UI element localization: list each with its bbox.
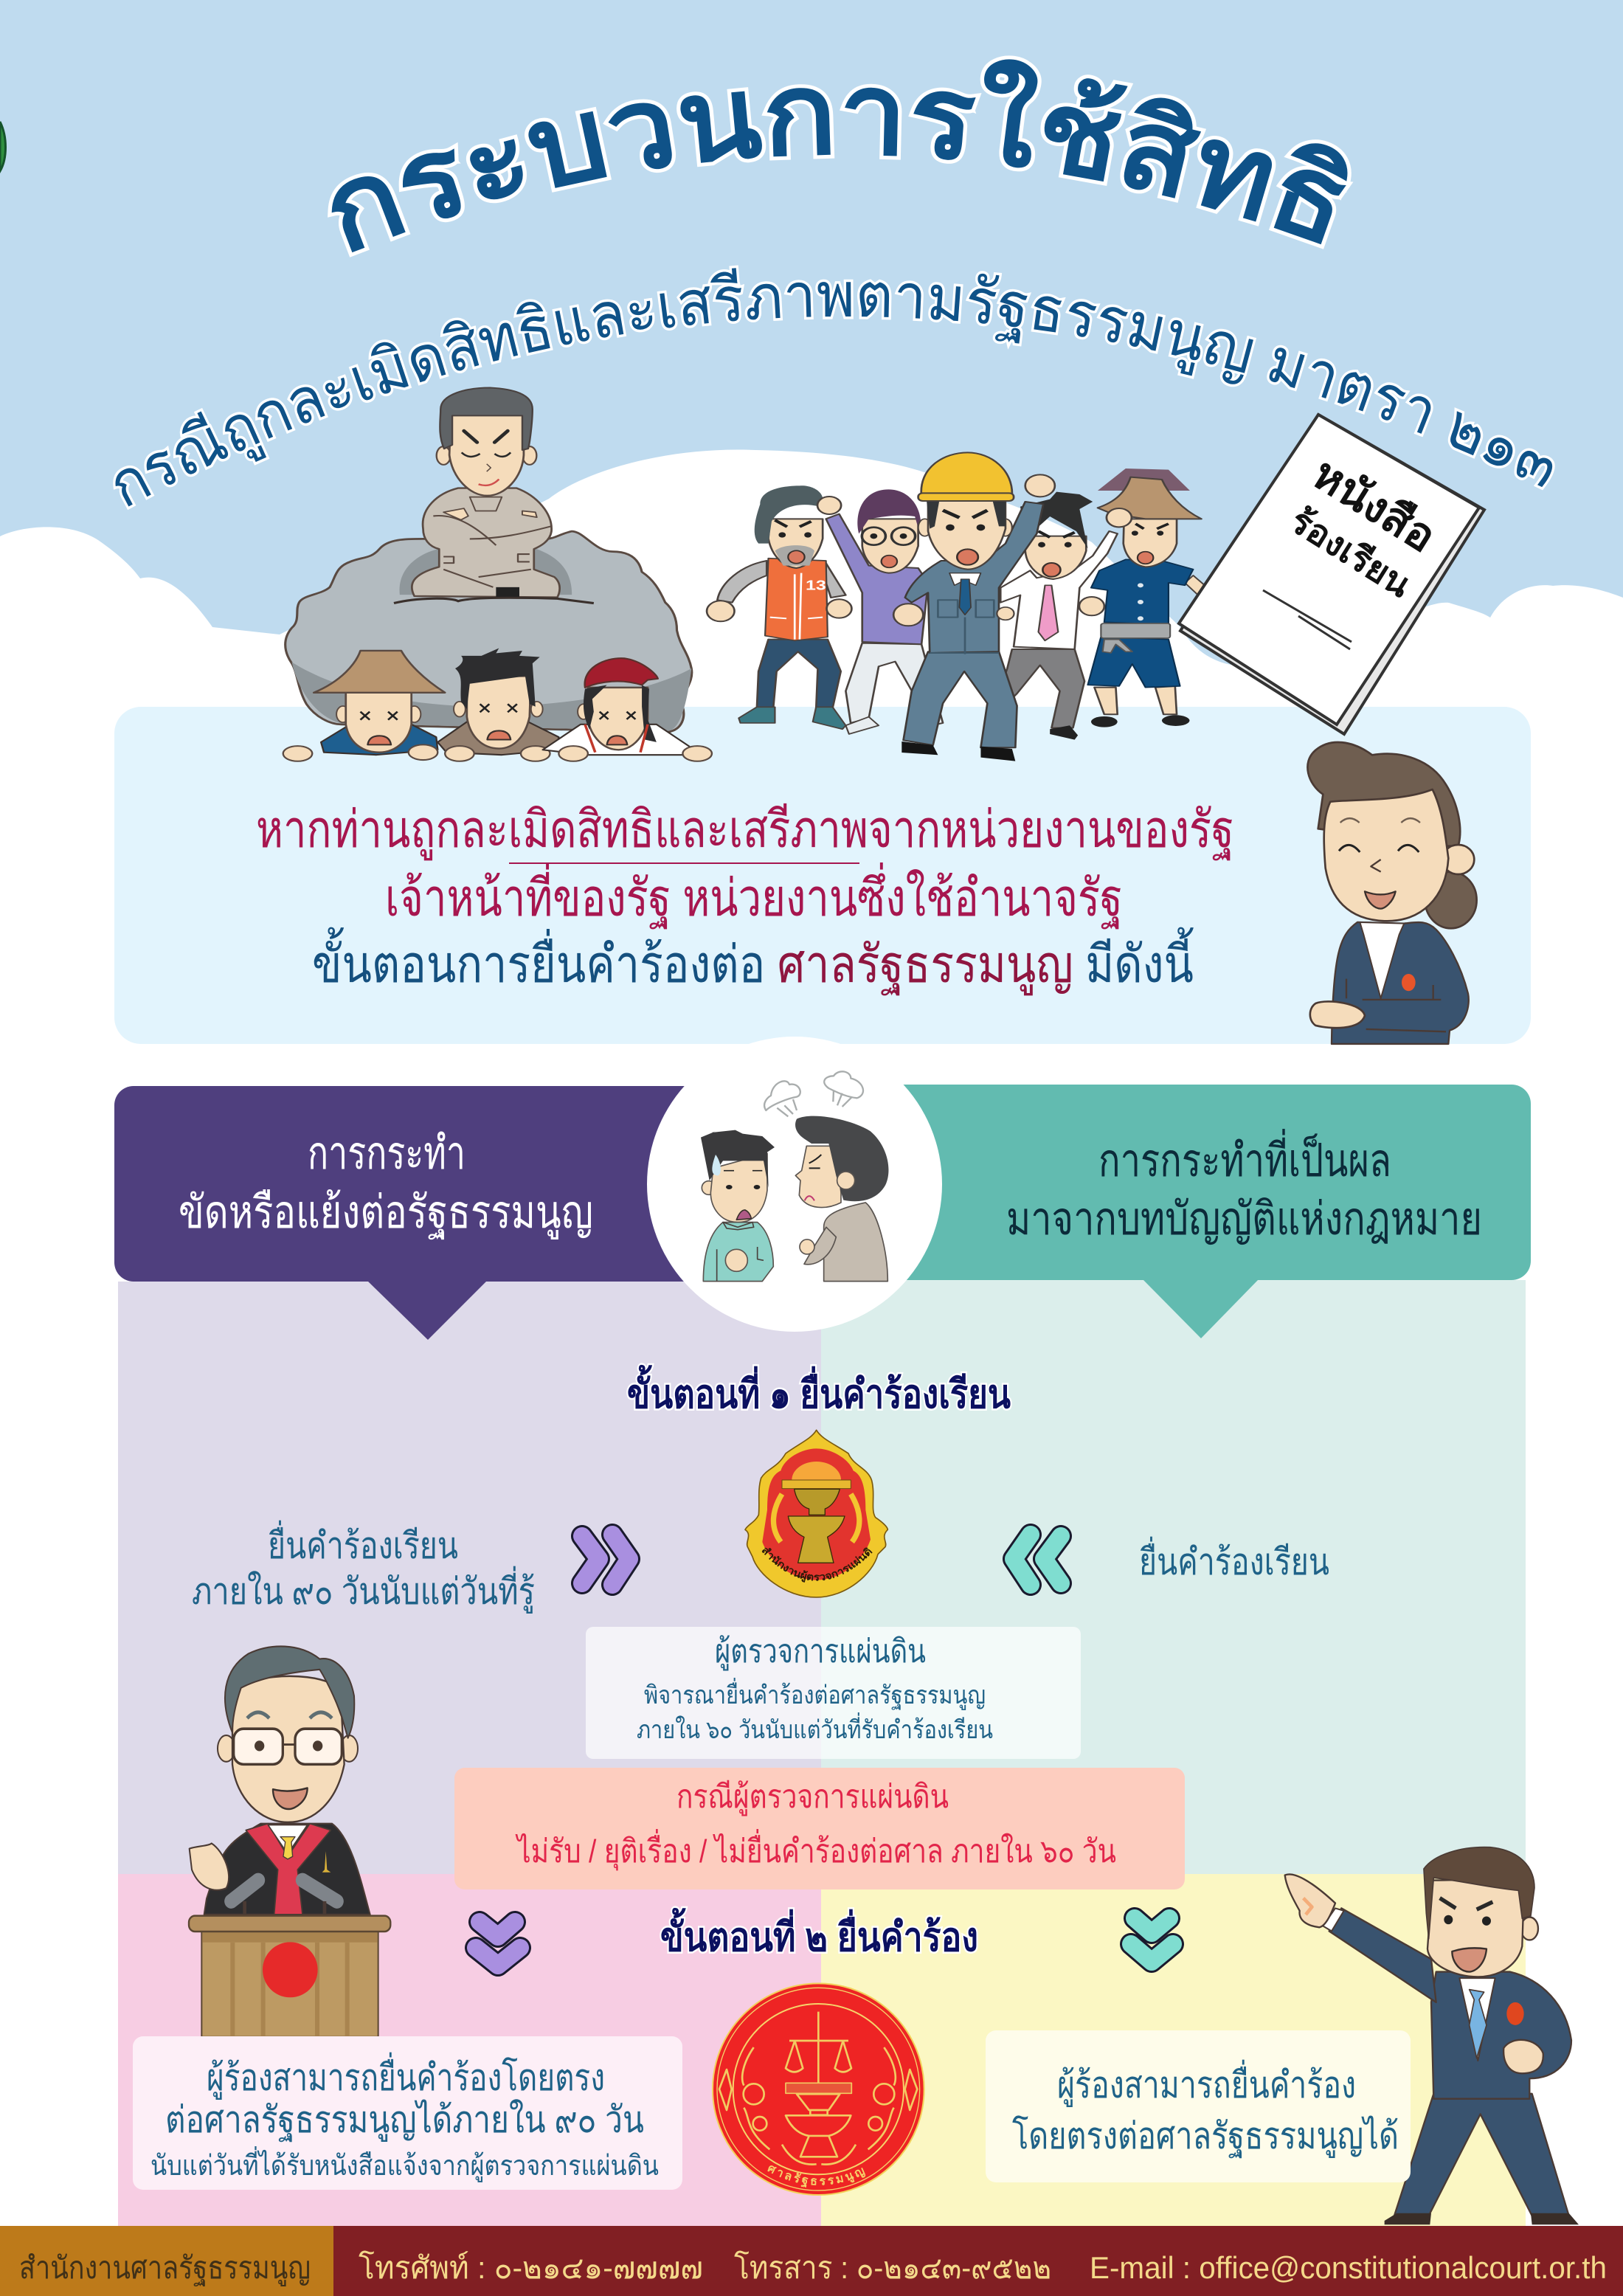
subtitle: กรณีถูกละเมิดสิทธิและเสรีภาพตามรัฐธรรมนูญ มาตรา ๒๑๓ [113, 266, 1555, 510]
illustration: petition document [1179, 415, 1484, 734]
header: action contrary to constitution [114, 1086, 741, 1340]
box: direct filing to constitutional court [986, 2030, 1411, 2182]
intro text: เจ้าหน้าที่ของรัฐ หน่วยงานซึ่งใช้อำนาจรัฐ [385, 862, 1123, 929]
header: action resulting from legal provisions [848, 1085, 1531, 1338]
panel: step background yellow [821, 1874, 1526, 2226]
header text left [179, 1128, 593, 1239]
header text left: ขัดหรือแย้งต่อรัฐธรรมนูญ [179, 1187, 593, 1239]
icon: steam puffs [764, 1071, 863, 1116]
protester: yellow helmet foreman [893, 452, 1055, 761]
box: direct filing within 90 days: ผู้ร้องสามารถยื่นคำร้องโดยตรง [207, 2053, 605, 2100]
panel: intro [114, 707, 1531, 1044]
illustration: woman presenter [1307, 742, 1477, 1044]
illustration: two arguing men in circle [647, 1037, 942, 1332]
trapped person: farmer [283, 651, 445, 761]
title: กระบวนการใช้สิทธิ [328, 55, 1353, 257]
box: ombudsman rejection case: กรณีผู้ตรวจการแผ่นดิน [676, 1779, 949, 1816]
icon: double chevron down teal [1131, 1918, 1173, 1962]
document subtitle text: ร้องเรียน [1283, 501, 1417, 605]
box: ombudsman consideration: ผู้ตรวจการแผ่นดิน [715, 1633, 926, 1671]
protester: white shirt [987, 492, 1132, 740]
header text right: การกระทำที่เป็นผล [1098, 1129, 1391, 1186]
illustration: judge at podium [189, 1646, 390, 2037]
footer: โทรศัพท์ : ๐-๒๑๔๑-๗๗๗๗ [359, 2250, 703, 2285]
heading: step 2: ขั้นตอนที่ ๒ ยื่นคำร้อง [660, 1908, 978, 1960]
seal caption: ศาลรัฐธรรมนูญ [767, 2165, 866, 2188]
header text right: มาจากบทบัญญัติแห่งกฎหมาย [1006, 1194, 1482, 1245]
trapped person: spiky hair [437, 649, 558, 761]
box: direct filing within 90 days: ต่อศาลรัฐธรรมนูญได้ภายใน ๙๐ วัน [165, 2099, 644, 2142]
box: direct filing to constitutional court: ผู้ร้องสามารถยื่นคำร้อง [1057, 2060, 1356, 2107]
icon: double chevron down purple [476, 1922, 520, 1965]
seated man [394, 387, 594, 604]
icon: ombudsman emblem [744, 1430, 888, 1598]
header text left: การกระทำ [308, 1128, 466, 1179]
man: teal sweater [701, 1130, 775, 1282]
illustration: pointing lawyer [1285, 1847, 1579, 2224]
protester: orange vest [707, 485, 851, 729]
box: ombudsman rejection case: ไม่รับ / ยุติเรื่อง / ไม่ยื่นคำร้องต่อศาล ภายใน ๖๐ วัน [515, 1828, 1116, 1871]
box: direct filing to constitutional court: โดยตรงต่อศาลรัฐธรรมนูญได้ [1012, 2115, 1399, 2158]
icon: double chevron right [582, 1535, 629, 1585]
illustration: official seated on rock over citizens [283, 387, 712, 761]
footer [0, 2226, 1623, 2296]
heading: step 1: ขั้นตอนที่ ๑ ยื่นคำร้องเรียน [627, 1365, 1011, 1417]
icon: double chevron left [1014, 1535, 1061, 1585]
man: grey shirt [795, 1116, 888, 1282]
panel: step background lavender [118, 1282, 821, 1874]
box: ombudsman consideration [586, 1627, 1081, 1759]
emblem caption: สำนักงานผู้ตรวจการแผ่นดิน [761, 1548, 873, 1583]
trapped person: red bandana [543, 658, 712, 761]
panel: step background pink [118, 1874, 821, 2226]
intro text [256, 801, 1234, 996]
intro text: หากท่านถูกละเมิดสิทธิและเสรีภาพจากหน่วยงานของรัฐ [256, 801, 1234, 861]
protester: orange vest: 13 [806, 577, 826, 593]
podium [189, 1916, 390, 2037]
footer: E-mail : office@constitutionalcourt.or.th [1090, 2250, 1607, 2285]
box: direct filing within 90 days: นับแต่วันที่ได้รับหนังสือแจ้งจากผู้ตรวจการแผ่นดิน [150, 2146, 659, 2182]
step 1 right text: ยื่นคำร้องเรียน [1139, 1537, 1329, 1583]
background: sky [0, 0, 1623, 812]
icon: green arc at left edge [0, 122, 6, 171]
footer: สำนักงานศาลรัฐธรรมนูญ [19, 2250, 311, 2286]
box: ombudsman rejection case [454, 1768, 1185, 1889]
header text right [1006, 1129, 1482, 1245]
background: white clouds [0, 450, 1623, 1107]
step 1 left text: ภายใน ๙๐ วันนับแต่วันที่รู้ [192, 1566, 535, 1614]
podium seal [263, 1942, 318, 1997]
panel: step background mint [821, 1280, 1526, 1874]
protester: purple sweater [826, 489, 943, 734]
protester: blue shirt with hat [1079, 468, 1205, 727]
intro text: ขั้นตอนการยื่นคำร้องต่อ ศาลรัฐธรรมนูญ มีดังนี้ [312, 927, 1194, 996]
illustration: protesting crowd [707, 452, 1205, 761]
box: direct filing within 90 days [133, 2036, 682, 2190]
step 1 left text [192, 1521, 535, 1614]
box: ombudsman consideration: พิจารณายื่นคำร้องต่อศาลรัฐธรรมนูญ [644, 1678, 986, 1710]
footer: โทรสาร : ๐-๒๑๔๓-๙๕๒๒ [734, 2250, 1051, 2285]
document title text: หนังสือ [1304, 449, 1444, 561]
box: ombudsman consideration: ภายใน ๖๐ วันนับแต่วันที่รับคำร้องเรียน [637, 1712, 993, 1744]
icon: constitutional court seal [712, 1982, 925, 2196]
rock [286, 531, 692, 732]
step 1 left text: ยื่นคำร้องเรียน [268, 1521, 458, 1566]
